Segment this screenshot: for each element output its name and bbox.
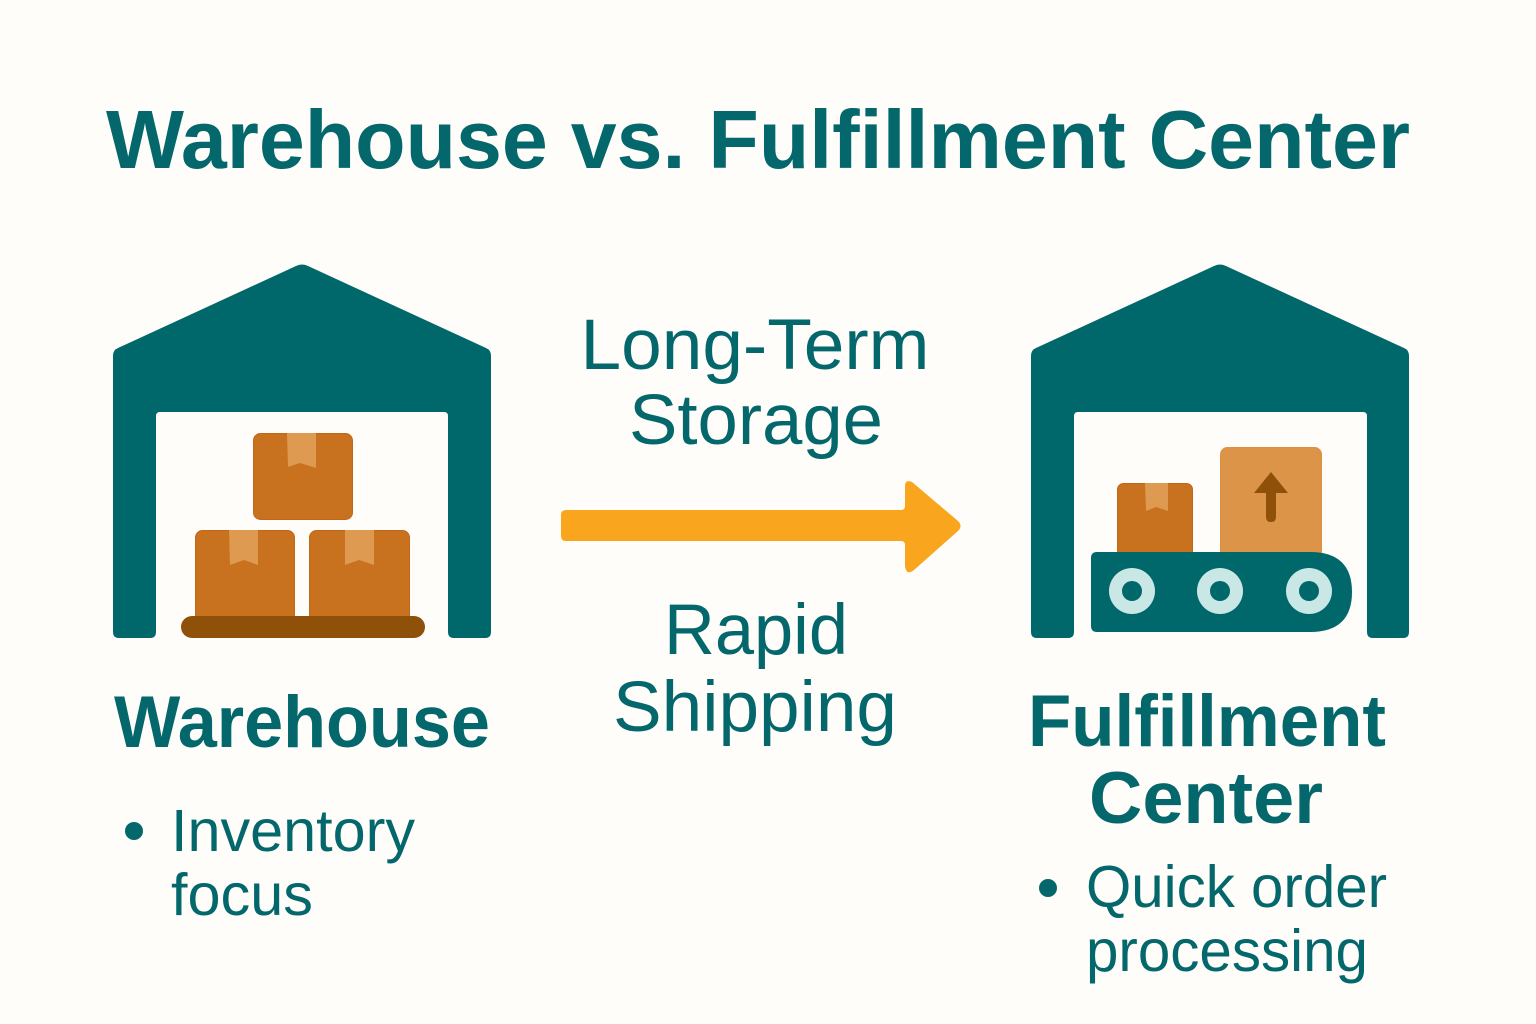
label: rapid shipping: [613, 591, 897, 747]
label: long-term storage: [580, 306, 930, 460]
bullet: inventory focus: [125, 798, 415, 928]
heading: fulfillment center: Fulfillment: [1028, 681, 1386, 762]
label: long-term storage: Long-Term: [580, 306, 930, 385]
bullet: quick order processing: processing: [1086, 918, 1368, 984]
icon: warehouse building: [113, 264, 491, 638]
arrow: [561, 481, 960, 572]
bullet: inventory focus: focus: [171, 862, 313, 928]
label: long-term storage: Storage: [629, 381, 883, 460]
heading: fulfillment center: [1028, 681, 1386, 839]
label: rapid shipping: Rapid: [664, 591, 848, 670]
bullet: quick order processing: Quick order: [1086, 854, 1387, 920]
bullet: quick order processing: [1039, 854, 1387, 984]
icon: fulfillment building: [1031, 264, 1409, 638]
label: rapid shipping: Shipping: [613, 668, 897, 747]
panel: warehouse: [113, 264, 491, 928]
title: Warehouse vs. Fulfillment Center: [106, 93, 1410, 186]
icon: stacked boxes on pallet: [181, 433, 425, 638]
heading: fulfillment center: Center: [1089, 758, 1323, 839]
icon: boxes on conveyor: [1091, 448, 1352, 632]
panel: center comparison: [561, 306, 960, 747]
bullet: inventory focus: Inventory: [171, 798, 415, 864]
panel: fulfillment center: [1028, 264, 1409, 984]
heading: warehouse: Warehouse: [114, 682, 490, 763]
